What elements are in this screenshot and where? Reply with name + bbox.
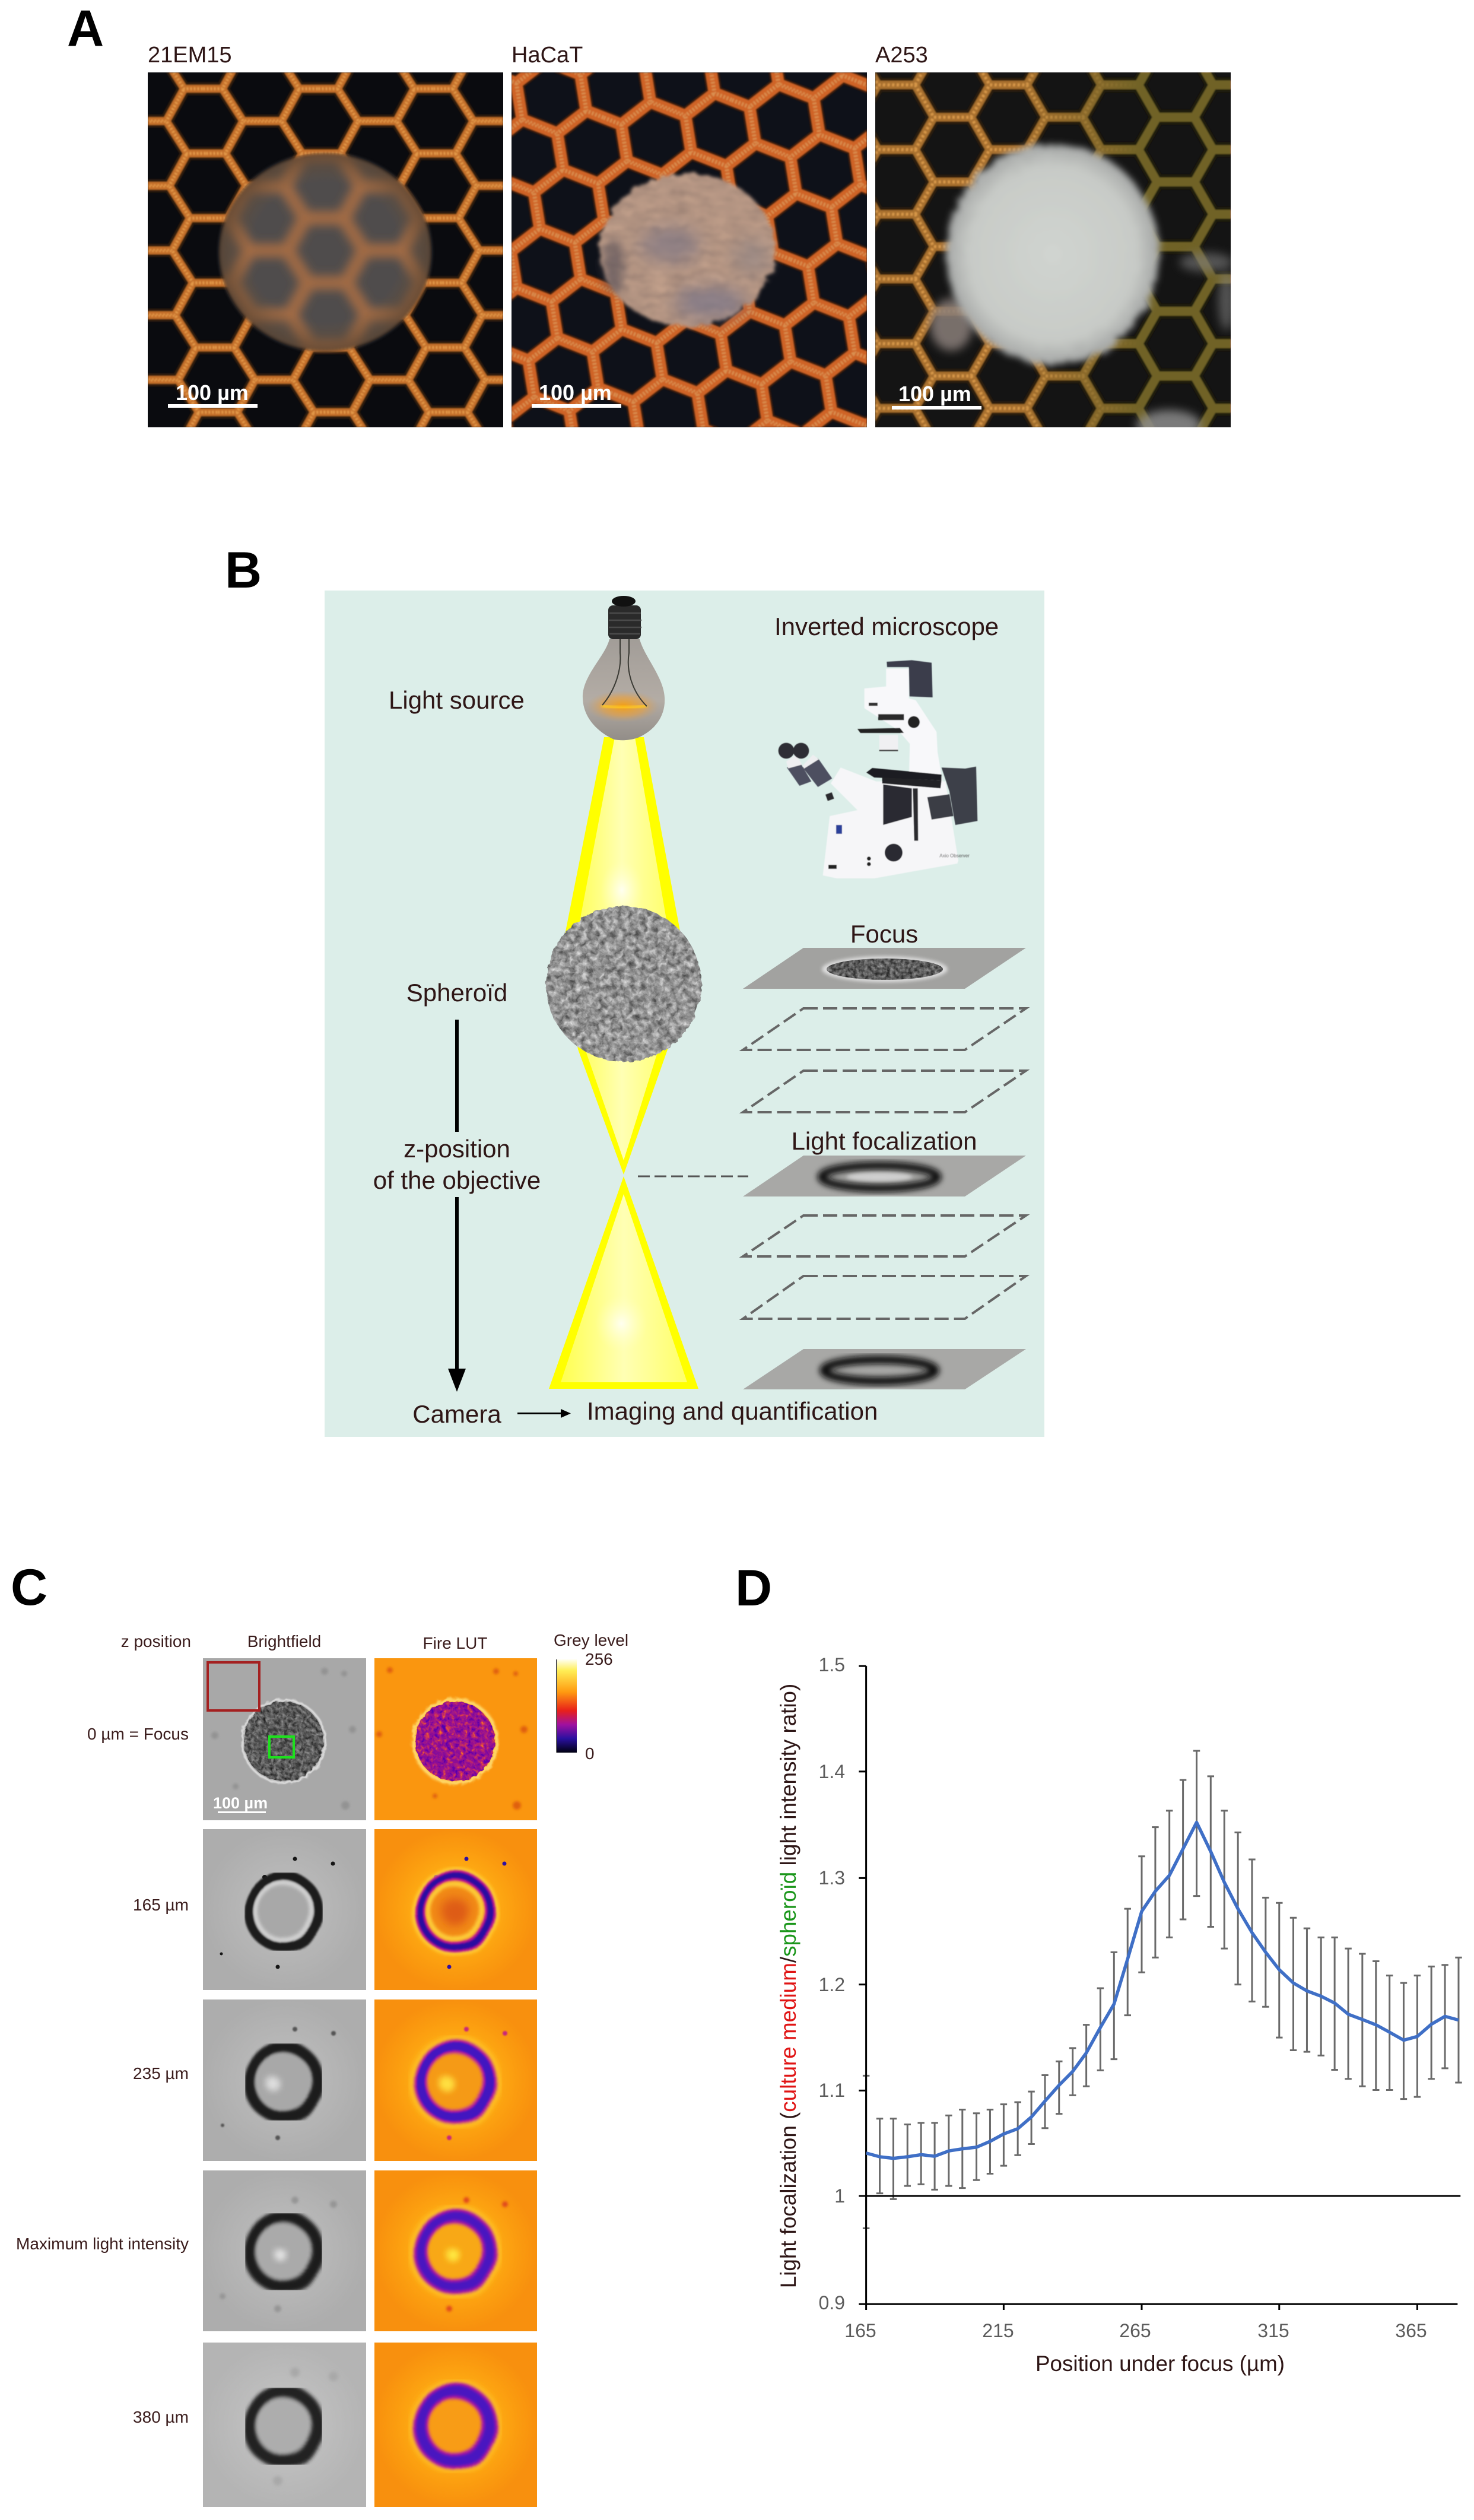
label: light focalization: Light focalization [792,1127,977,1155]
fire LUT image: 380 um [374,2343,537,2507]
arrow: z-position axis to camera [448,1197,466,1392]
legend: grey level colour bar: 256 [585,1650,613,1668]
icon: light bulb [583,596,665,740]
photo: A253 spheroid on copper grid [875,72,1235,441]
row label: 380 um: 380 µm [133,2408,189,2426]
plane outline: dashed [743,1276,1026,1319]
label: camera: Camera [412,1400,501,1428]
label: 21EM15: 21EM15 [148,43,232,68]
plane image: focus [743,948,1026,989]
fire LUT image: focus [374,1658,537,1820]
y axis tick labels: 1.3 [819,1867,845,1889]
y axis tick labels: 1.4 [819,1761,845,1782]
brightfield image: maximum light intensity [203,2170,366,2331]
label: focus: Focus [850,920,918,948]
row label: 235 um: 235 µm [133,2064,189,2083]
column header: z position: z position [121,1632,191,1651]
x axis tick labels: 265 [1119,2320,1151,2341]
icon: inverted microscope [779,660,977,878]
scale bar 100 um [892,386,981,410]
panel C: brightfield and fire LUT image grid [16,1631,628,2507]
y axis tick labels: 1.2 [819,1974,845,1995]
smudges [930,253,1235,441]
x axis tick labels [844,2320,1427,2341]
x axis tick labels: 215 [982,2320,1014,2341]
legend: grey level colour bar [554,1631,628,1763]
plane image: light focalization [743,1156,1026,1196]
brightfield image: focus [203,1658,366,1820]
data line: blue mean curve [866,1823,1459,2159]
arrow: camera to imaging [517,1409,571,1418]
spheroid: opaque A253 [946,144,1159,364]
y axis title: Light focalization (culture medium/spheroïd light intensity ratio) [776,1684,800,2288]
spheroid: translucent 21EM15 [217,151,433,354]
row label: 0 um focus: 0 µm = Focus [87,1725,189,1743]
red ROI: culture medium [208,1662,259,1710]
brightfield image: 235 um [203,2000,366,2161]
fire LUT image: 165 um [374,1829,537,1990]
plane outline: dashed [743,1008,1026,1050]
y axis tick labels: 1.5 [819,1654,845,1675]
x axis tick labels: 165 [844,2320,876,2341]
fire LUT image: 235 um [374,2000,537,2161]
photo: HaCaT spheroid on copper grid [512,72,867,427]
panel letter A: A [67,0,104,57]
y axis tick labels: 1.1 [819,2080,845,2101]
brightfield image: 165 um [203,1829,366,1990]
label: imaging and quantification: Imaging and quantification [587,1397,878,1425]
axes and reference line [859,1666,1460,2310]
panel letter B: B [225,542,262,599]
arrow: z-position axis upper segment [455,1020,459,1132]
scale bar 100 um: 100 µm [539,380,612,405]
spheroid: fluffy HaCaT [599,173,775,326]
x axis tick labels: 365 [1395,2320,1427,2341]
legend: grey level colour bar: 0 [585,1744,595,1763]
y axis tick labels [819,1654,845,2313]
spheroid micrograph [546,906,701,1062]
label: z-position of the objective: of the objective [373,1166,541,1194]
panel B: optical setup diagram [325,591,1044,1437]
label: spheroid: Spheroïd [406,979,507,1007]
scale bar 100 um [532,385,621,408]
brightfield image: 380 um [203,2343,366,2507]
scale bar 100 um: 100 µm [213,1794,268,1812]
column header: brightfield: Brightfield [247,1632,321,1651]
light beam: upper [561,737,682,1175]
label: light source: Light source [389,686,525,714]
label: HaCaT: HaCaT [512,43,583,68]
legend: grey level colour bar: Grey level [554,1631,628,1649]
plot area [859,1666,1462,2310]
x axis title: Position under focus (µm) [1035,2351,1285,2376]
label: inverted microscope: Inverted microscope [774,612,999,640]
label: z-position of the objective: z-position [404,1135,510,1163]
scale bar 100 um [168,385,258,408]
icon: inverted microscope: Axio Observer [939,853,970,859]
y axis tick labels: 1 [834,2185,845,2207]
row label: maximum light intensity: Maximum light intensity [16,2235,189,2253]
light beam: lower [549,1176,698,1389]
panel background [325,591,1044,1437]
x axis tick labels: 315 [1257,2320,1289,2341]
column header: fire LUT: Fire LUT [423,1634,487,1652]
error bars [863,1751,1462,2229]
green ROI: spheroid [269,1737,294,1757]
panel letter D: D [735,1560,772,1617]
panel D: line chart [776,1654,1462,2376]
label: z-position of the objective [373,1135,541,1194]
panel letter C: C [11,1559,47,1616]
panel A: spheroid photographs on grids [148,43,1235,441]
fire LUT image: maximum light intensity [374,2170,537,2331]
photo: 21EM15 spheroid on copper grid [148,72,503,427]
plane outline: dashed [743,1071,1026,1112]
y axis tick labels: 0.9 [819,2292,845,2313]
plane outline: dashed [743,1215,1026,1256]
scale bar 100 um: 100 µm [898,382,971,406]
row label: 165 um: 165 µm [133,1896,189,1914]
dashed connector: focal point to plane [638,1175,748,1178]
label: A253: A253 [875,43,928,68]
scale bar 100 um: 100 µm [176,380,249,405]
plane image: below focalization [743,1349,1026,1389]
